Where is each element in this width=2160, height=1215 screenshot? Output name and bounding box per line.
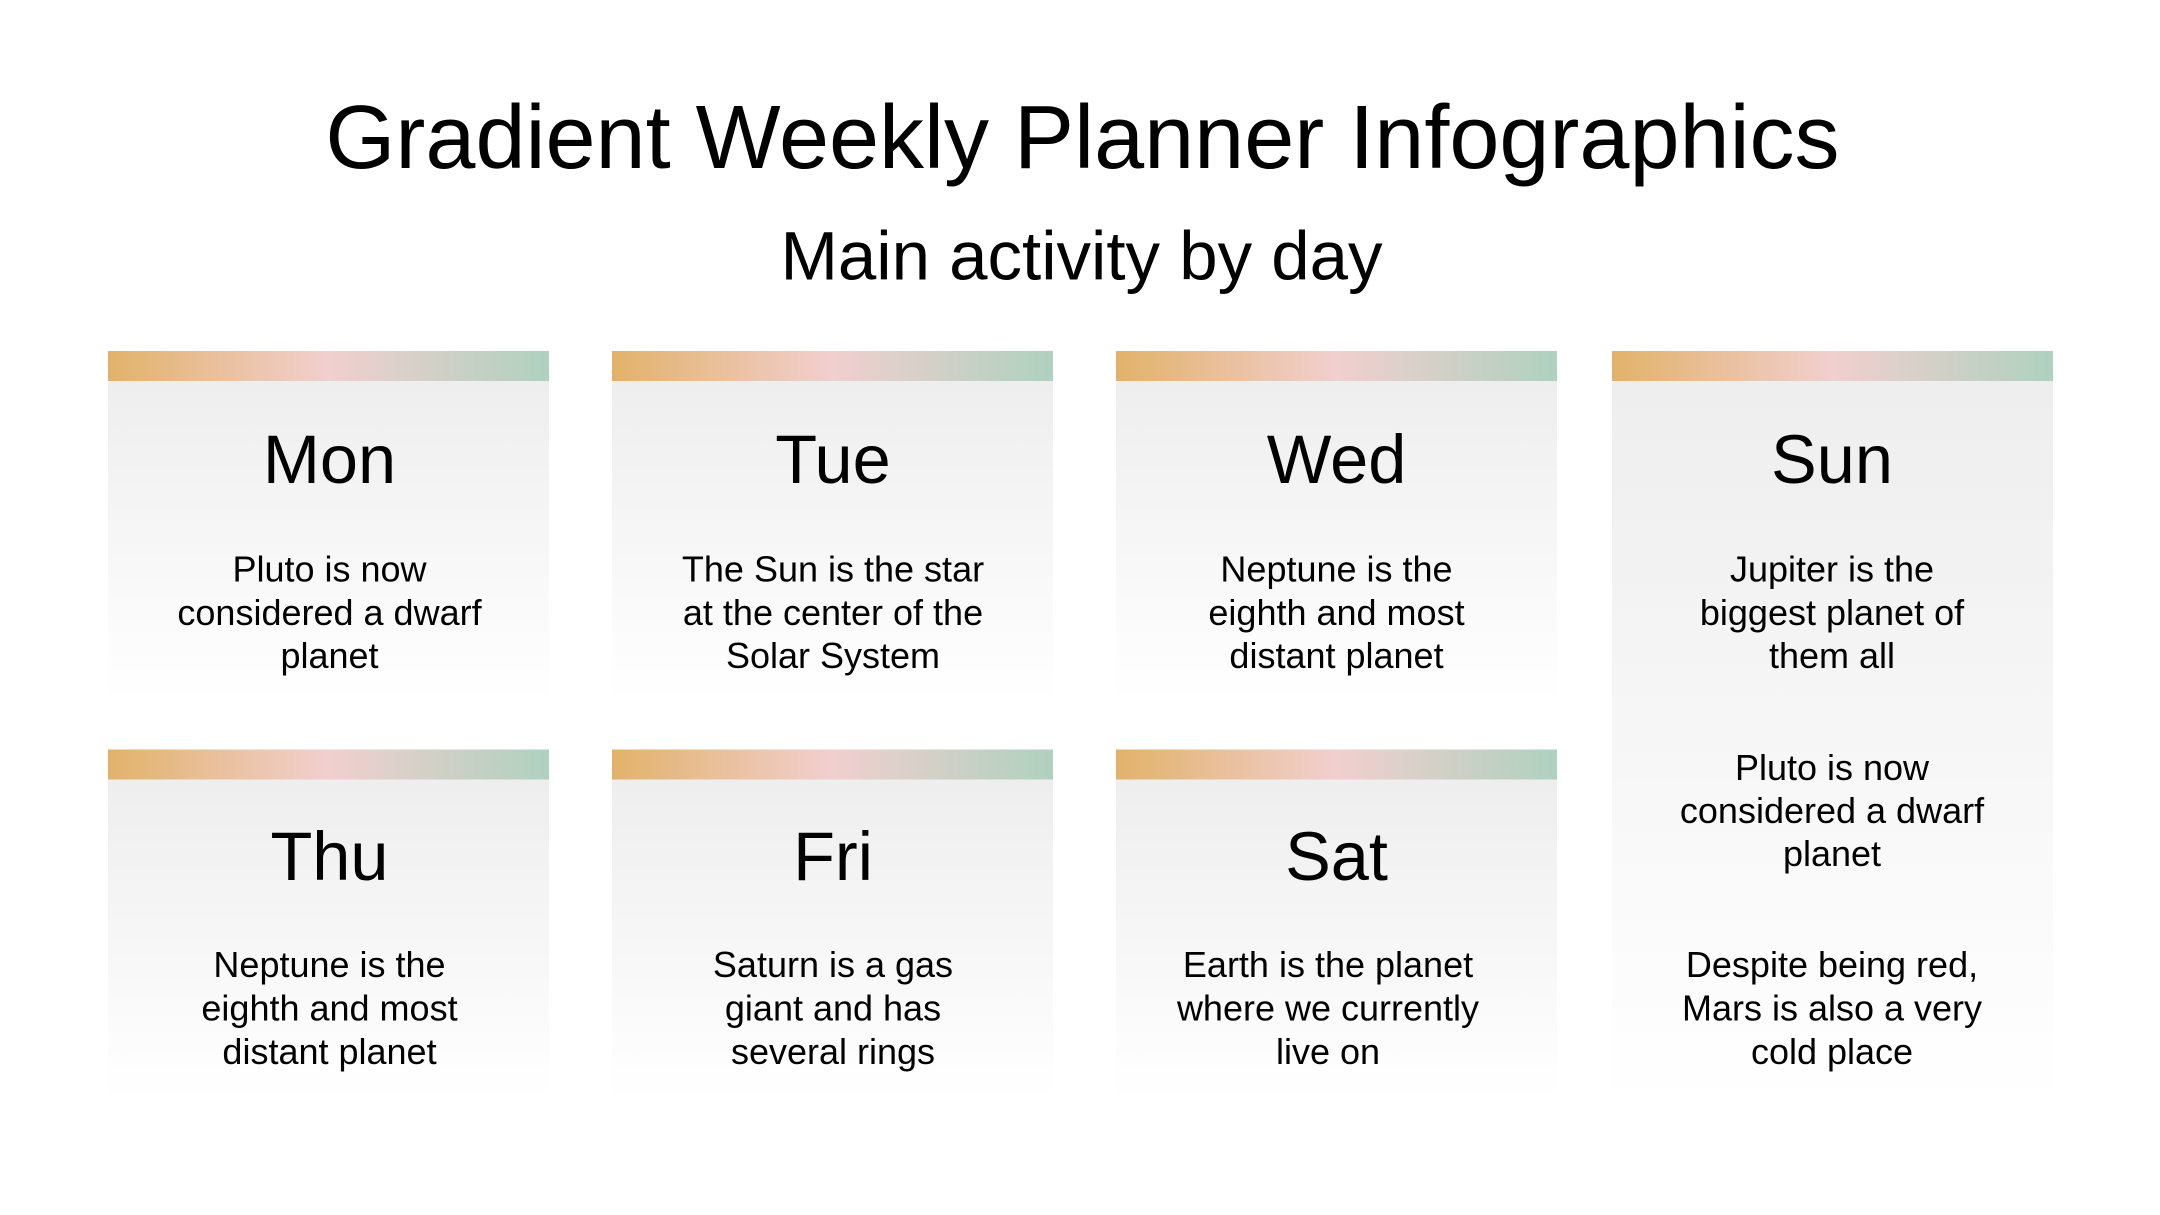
- panel: Sat: Earth is the planet: [1183, 944, 1473, 985]
- panel: Mon: Mon: [263, 421, 396, 498]
- panel: Tue: The Sun is the star: [682, 548, 984, 590]
- panel: Wed: [1116, 351, 1557, 701]
- panel: Fri: Saturn is a gas: [713, 944, 953, 985]
- panel: Thu: Neptune is the: [213, 944, 446, 985]
- panel: Mon: Pluto is now: [232, 548, 428, 590]
- panel: Sun: [1612, 351, 2053, 1107]
- subtitle: Main activity by day: [780, 218, 1383, 294]
- panel: Tue: [612, 351, 1053, 701]
- panel: Sun: Mars is also a very: [1682, 988, 1982, 1028]
- panel: Sun: Jupiter is the: [1730, 548, 1934, 590]
- panel: Mon: considered a dwarf: [177, 592, 483, 633]
- panel: Thu: eighth and most: [201, 988, 458, 1028]
- panel: Sat: [1116, 750, 1557, 1100]
- panel: Tue: Solar System: [726, 635, 940, 676]
- panel: Fri: several rings: [731, 1031, 935, 1072]
- panel: Wed: Wed: [1267, 421, 1406, 498]
- panel: Sun: cold place: [1751, 1031, 1913, 1072]
- panel: Thu: distant planet: [222, 1031, 437, 1072]
- panel: Sun: Sun: [1771, 421, 1893, 498]
- panel: Sun: them all: [1769, 635, 1895, 676]
- panel: Sat: live on: [1276, 1031, 1380, 1072]
- panel: Tue: at the center of the: [683, 592, 983, 633]
- panel: Wed: distant planet: [1229, 635, 1444, 676]
- panel: Sun: considered a dwarf: [1680, 790, 1985, 831]
- title: Gradient Weekly Planner Infographics: [325, 88, 1840, 188]
- panel: Sun: Pluto is now: [1735, 747, 1930, 788]
- panel: Sun: Despite being red,: [1686, 944, 1978, 985]
- panel: Sun: planet: [1783, 833, 1881, 874]
- panel: Thu: Thu: [270, 818, 389, 895]
- panel: Thu: [108, 750, 549, 1100]
- panel: Mon: planet: [280, 635, 379, 676]
- panel: Wed: Neptune is the: [1220, 548, 1453, 590]
- panel: Fri: Fri: [793, 818, 873, 895]
- panel: Fri: giant and has: [725, 988, 941, 1028]
- panel: Sun: biggest planet of: [1700, 592, 1965, 633]
- panel: Mon: [108, 351, 549, 701]
- panel: Tue: Tue: [775, 421, 891, 498]
- panel: Sat: Sat: [1285, 818, 1388, 895]
- panel: Fri: [612, 750, 1053, 1100]
- panel: Sat: where we currently: [1176, 988, 1479, 1028]
- panel: Wed: eighth and most: [1208, 592, 1465, 633]
